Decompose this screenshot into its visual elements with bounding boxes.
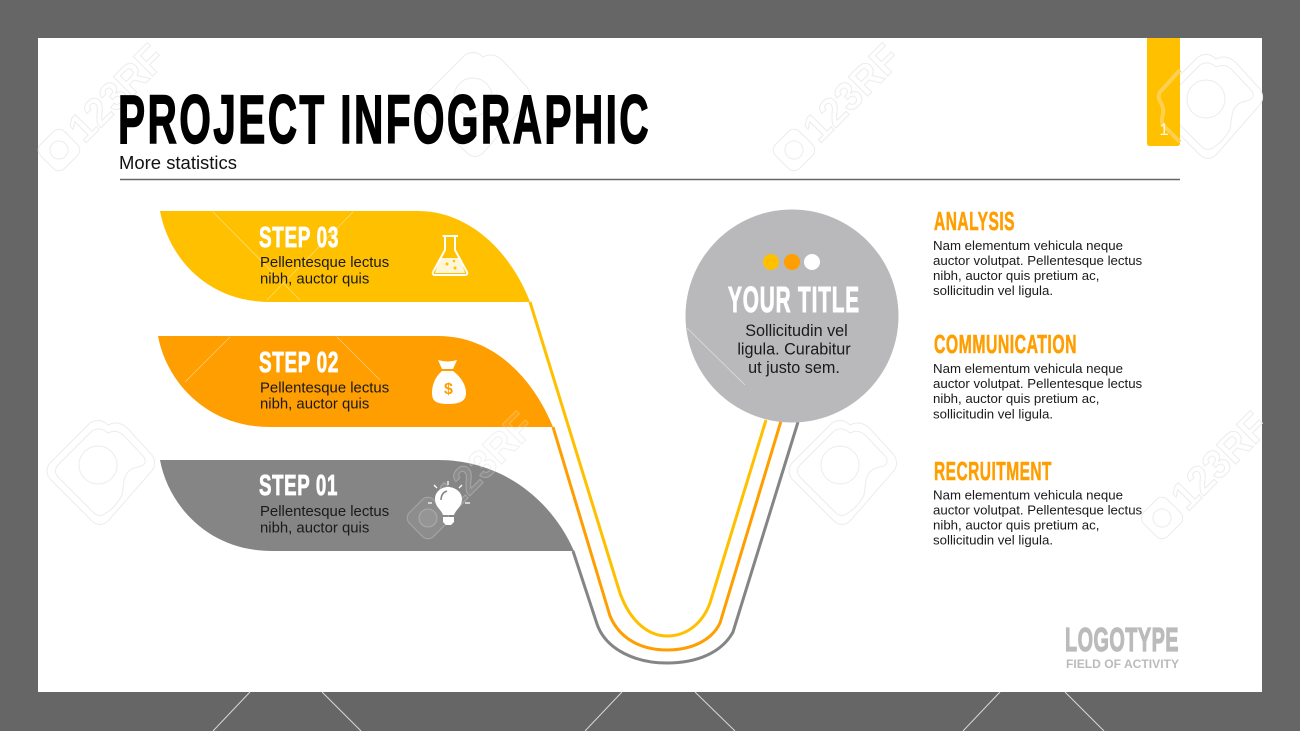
circle text: ut justo sem. xyxy=(748,359,840,377)
text block: recruitment xyxy=(933,458,1143,548)
step 01 heading: STEP 01 xyxy=(259,470,338,502)
step 03 text: nibh, auctor quis xyxy=(260,272,369,288)
circle title: YOUR TITLE xyxy=(728,279,860,320)
connector lines xyxy=(530,302,798,663)
communication text: nibh, auctor quis pretium ac, xyxy=(933,391,1099,406)
analysis heading: ANALYSIS xyxy=(934,208,1015,236)
text block: communication xyxy=(933,331,1143,422)
text: 123RF xyxy=(1163,404,1277,519)
logotype: FIELD OF ACTIVITY xyxy=(1066,657,1179,671)
icon: flask xyxy=(433,236,467,275)
communication text: auctor volutpat. Pellentesque lectus xyxy=(933,376,1143,391)
step 03 heading: STEP 03 xyxy=(259,222,339,254)
dots xyxy=(763,254,820,270)
recruitment text: nibh, auctor quis pretium ac, xyxy=(933,518,1099,532)
step 03 text: Pellentesque lectus xyxy=(260,255,389,271)
step 02 heading: STEP 02 xyxy=(259,347,339,379)
text: 123RF xyxy=(795,36,909,151)
line: step 03 xyxy=(530,302,766,636)
panel: step 01 xyxy=(160,404,574,551)
panel: step 03 xyxy=(160,211,530,302)
page number tab xyxy=(1147,38,1180,146)
analysis text: sollicitudin vel ligula. xyxy=(933,283,1053,298)
logotype: LOGOTYPE xyxy=(1065,621,1179,658)
step 02 text: nibh, auctor quis xyxy=(260,396,369,412)
circle text: Sollicitudin vel xyxy=(745,322,848,340)
communication heading: COMMUNICATION xyxy=(934,331,1077,359)
recruitment text: Nam elementum vehicula neque xyxy=(933,488,1123,502)
text block: analysis xyxy=(933,208,1143,298)
page number tab: 1 xyxy=(1159,120,1169,139)
icon: light bulb xyxy=(428,481,470,525)
step 01 text: Pellentesque lectus xyxy=(260,504,389,520)
line: step 01 xyxy=(573,422,798,663)
central circle xyxy=(686,210,898,422)
panel: step 02 xyxy=(158,336,553,427)
subtitle: More statistics xyxy=(119,153,237,173)
step 02 text: Pellentesque lectus xyxy=(260,380,389,396)
icon: money bag: $ xyxy=(444,381,453,398)
icon: money bag xyxy=(432,360,466,404)
analysis text: Nam elementum vehicula neque xyxy=(933,238,1123,253)
analysis text: nibh, auctor quis pretium ac, xyxy=(933,268,1099,283)
recruitment text: auctor volutpat. Pellentesque lectus xyxy=(933,502,1143,518)
communication text: sollicitudin vel ligula. xyxy=(933,406,1053,422)
text: 123RF xyxy=(429,404,543,519)
line: step 02 xyxy=(553,421,781,650)
recruitment text: sollicitudin vel ligula. xyxy=(933,532,1053,548)
title: PROJECT INFOGRAPHIC xyxy=(118,81,651,158)
panel: step 01: 123RF xyxy=(429,404,543,519)
circle text: ligula. Curabitur xyxy=(737,340,851,358)
analysis text: auctor volutpat. Pellentesque lectus xyxy=(933,253,1143,268)
logotype xyxy=(1065,621,1179,671)
step 01 text: nibh, auctor quis xyxy=(260,520,369,536)
recruitment heading: RECRUITMENT xyxy=(934,458,1052,486)
communication text: Nam elementum vehicula neque xyxy=(933,361,1123,376)
text: 123RF xyxy=(60,36,174,151)
